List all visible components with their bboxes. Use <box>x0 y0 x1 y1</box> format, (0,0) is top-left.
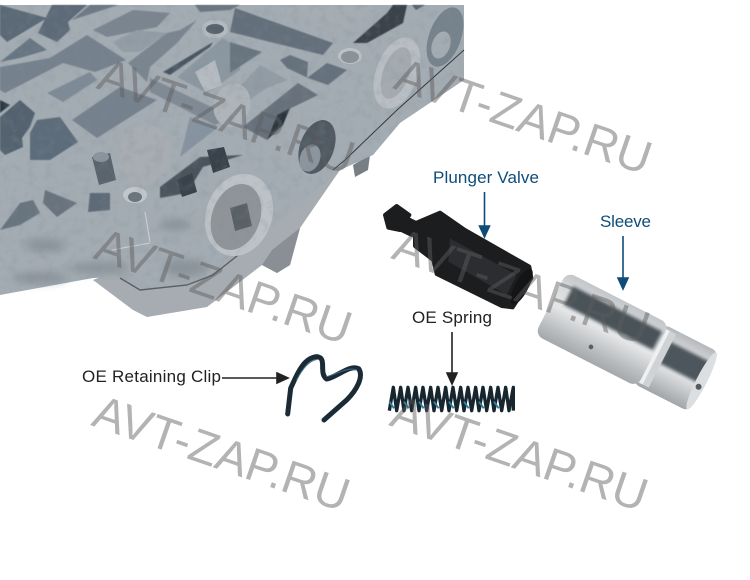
casting edge line <box>333 50 464 170</box>
raised top pad <box>277 5 373 35</box>
image: valve body casting <box>0 2 471 317</box>
cast bosses <box>109 60 256 192</box>
pan seam <box>120 236 262 290</box>
holes <box>123 20 362 203</box>
bright scratch <box>112 212 150 250</box>
casting surface texture <box>0 5 464 295</box>
part: OE retaining clip <box>288 357 360 420</box>
large port <box>194 164 284 266</box>
label: Plunger Valve: Plunger Valve <box>433 168 539 187</box>
part: OE spring <box>389 387 513 411</box>
arrow: to OE spring <box>447 332 457 384</box>
arrow: to OE retaining clip <box>222 373 288 383</box>
casting outline <box>0 5 464 295</box>
label: OE Spring: OE Spring <box>412 308 492 327</box>
pins <box>92 147 230 197</box>
watermarks: AVT-ZAP.RU: AVT-ZAP.RU <box>87 384 357 521</box>
arrow: to sleeve <box>618 236 628 289</box>
arrow: to plunger valve <box>480 192 490 237</box>
part: sleeve <box>535 272 723 414</box>
rail blotches <box>12 219 207 284</box>
watermarks: AVT-ZAP.RU <box>87 47 659 521</box>
watermarks: AVT-ZAP.RU: AVT-ZAP.RU <box>389 47 659 184</box>
watermarks: AVT-ZAP.RU: AVT-ZAP.RU <box>385 384 655 521</box>
watermarks: AVT-ZAP.RU: AVT-ZAP.RU <box>89 217 359 354</box>
part: plunger valve <box>385 206 537 307</box>
lower pan and bump <box>93 155 370 317</box>
upper ports <box>365 2 471 115</box>
label: OE Retaining Clip: OE Retaining Clip <box>82 367 221 386</box>
watermarks: AVT-ZAP.RU: AVT-ZAP.RU <box>92 47 362 184</box>
watermarks: AVT-ZAP.RU: AVT-ZAP.RU <box>387 217 657 354</box>
middle port <box>291 115 343 179</box>
label: Sleeve: Sleeve <box>600 212 651 231</box>
casting recesses <box>0 5 425 230</box>
